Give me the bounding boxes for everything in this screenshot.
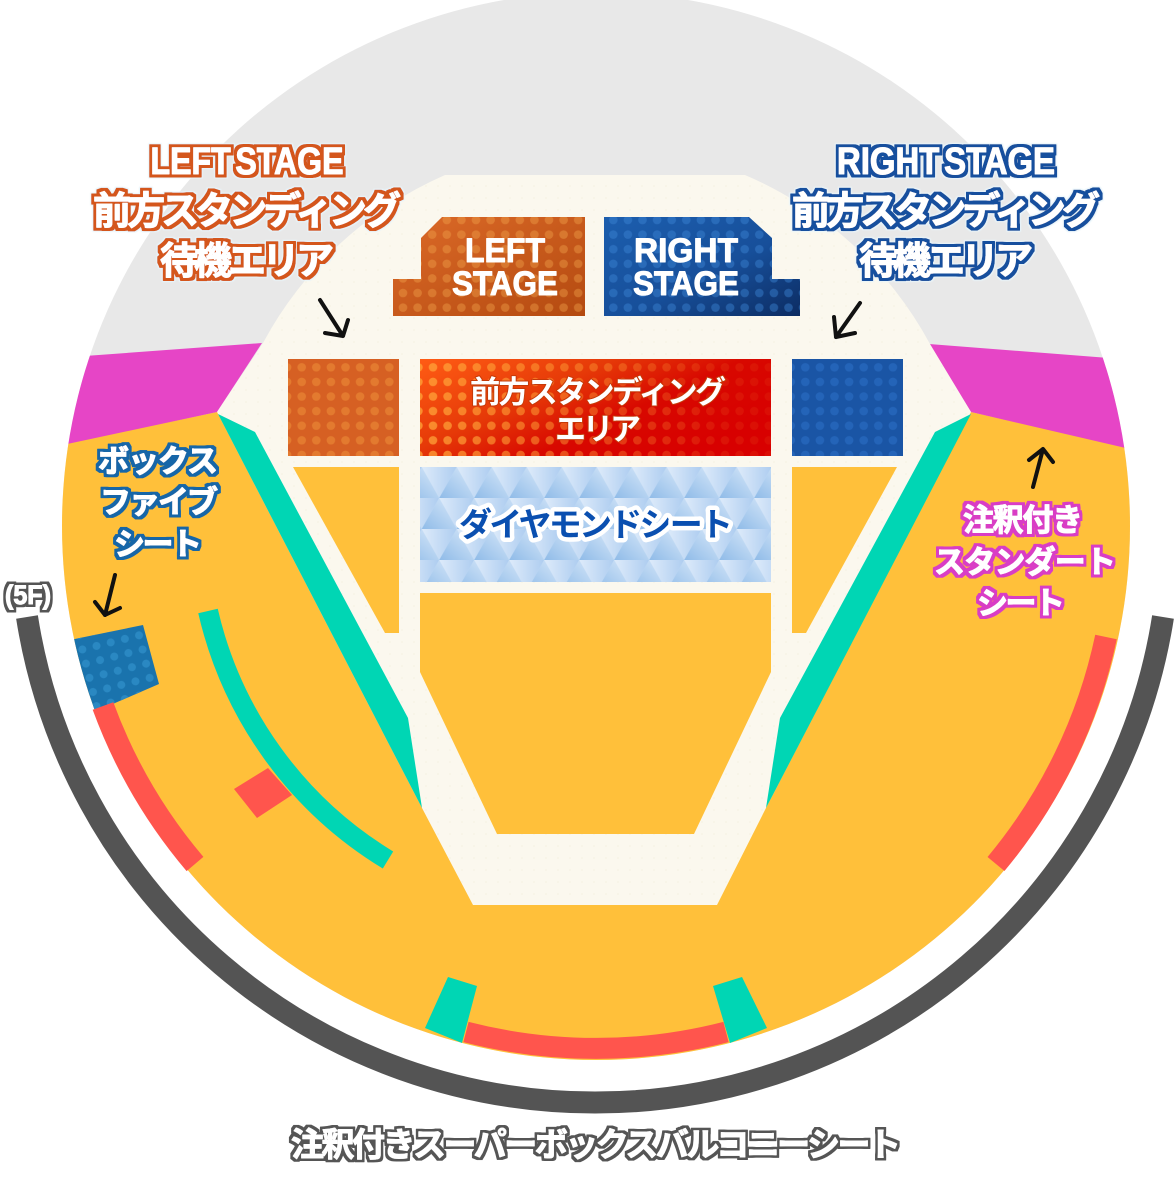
label: left stage waiting area: 待機エリア — [160, 241, 334, 283]
label: restricted standard seat — [934, 503, 1116, 621]
magenta upper seating right — [930, 344, 1124, 448]
label: left stage waiting area: 前方スタンディング — [93, 190, 401, 233]
label: right stage waiting area: 待機エリア — [859, 241, 1033, 283]
label: right stage waiting area: RIGHT STAGE — [837, 141, 1055, 183]
red small block — [234, 768, 292, 818]
magenta upper seating left — [68, 343, 262, 444]
label: restricted standard seat: 注釈付き — [963, 503, 1083, 538]
label: left stage waiting area — [93, 141, 401, 283]
label: box five seat: シート — [114, 527, 202, 562]
front standing area — [420, 359, 771, 456]
main floor seating: yellow area — [62, 412, 1130, 1060]
red seats left arc — [103, 706, 195, 864]
label: restricted standard seat: スタンダート — [934, 545, 1116, 580]
left stage block — [393, 217, 585, 316]
red seats right arc — [996, 637, 1106, 864]
front standing area: 前方スタンディング — [470, 375, 726, 410]
arrow: to magenta seats — [1029, 449, 1053, 487]
dark balcony arc — [27, 617, 1163, 1103]
left standing waiting area — [288, 359, 399, 456]
cream arena floor — [217, 175, 971, 905]
right standing waiting area — [792, 359, 903, 456]
teal aisle right — [766, 414, 971, 808]
label: box five seat — [98, 444, 218, 562]
label: right stage waiting area: 前方スタンディング — [792, 190, 1100, 233]
left stage block: STAGE — [452, 265, 558, 303]
right stage block: RIGHT — [634, 232, 738, 270]
red seats bottom arc — [466, 1032, 726, 1048]
yellow seating block centre — [420, 593, 771, 834]
label: right stage waiting area — [792, 141, 1100, 283]
yellow seating block left — [293, 467, 399, 633]
teal aisle bottom right — [713, 977, 767, 1043]
teal curved aisle — [208, 611, 388, 860]
yellow seating block right — [792, 467, 897, 633]
arrow: to box five — [95, 575, 120, 615]
label: box five seat: ファイブ — [100, 485, 218, 520]
box five seat block — [74, 625, 159, 710]
arrow: to right waiting area — [834, 303, 860, 337]
left stage block: LEFT — [465, 232, 545, 270]
label: box five seat: ボックス — [98, 444, 218, 479]
diamond seat block: ダイヤモンドシート — [459, 506, 733, 543]
label: left stage waiting area: LEFT STAGE — [150, 141, 344, 183]
label: 5F: (5F) — [5, 580, 51, 610]
label: restricted super box balcony seat: 注釈付きスーパーボックスバルコニーシート — [291, 1126, 901, 1163]
teal aisle bottom left — [425, 977, 477, 1043]
right stage block: STAGE — [633, 265, 739, 303]
right stage block — [604, 217, 800, 316]
diamond seat block — [420, 467, 771, 582]
label: restricted standard seat: シート — [977, 586, 1065, 621]
teal aisle left — [218, 414, 422, 808]
arrow: to left waiting area — [320, 300, 348, 336]
front standing area: エリア — [555, 412, 641, 447]
